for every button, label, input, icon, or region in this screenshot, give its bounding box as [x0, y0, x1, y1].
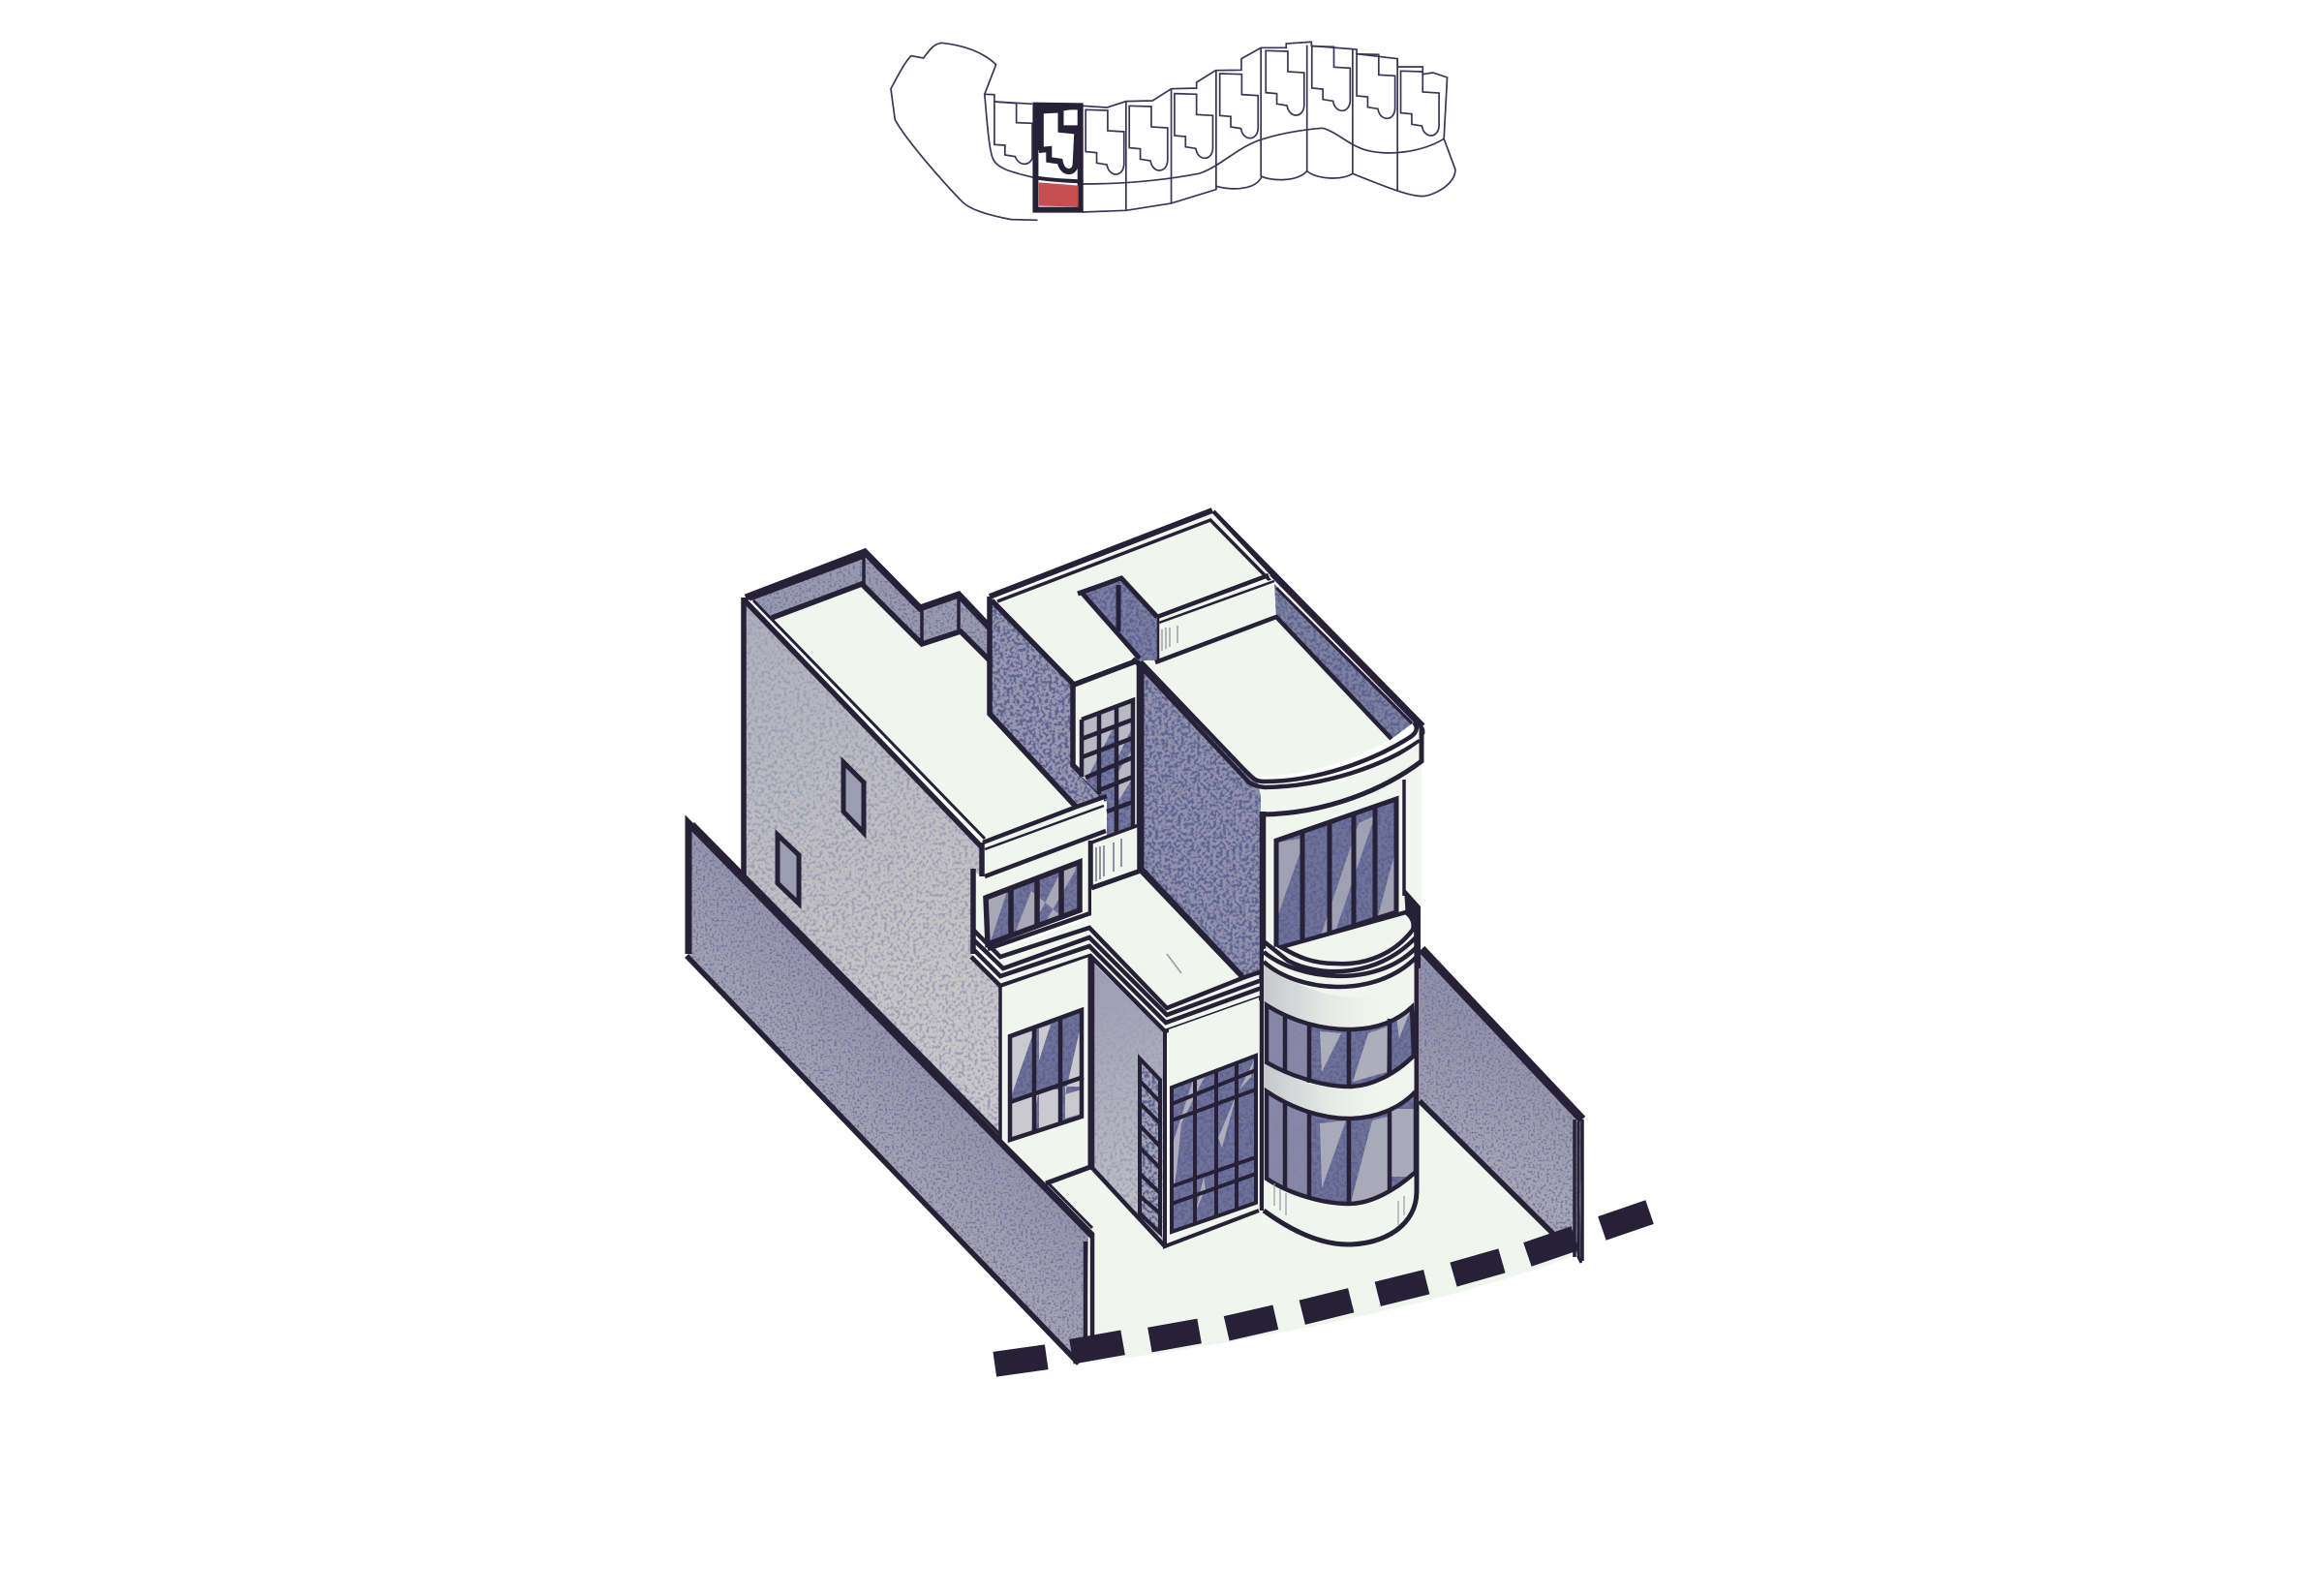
slit window — [1140, 1058, 1160, 1233]
lower curved tower — [1264, 912, 1419, 1244]
small side window upper — [843, 762, 864, 833]
lower ribbon glazing — [1269, 1095, 1414, 1202]
terrace with stepped cornice — [971, 871, 1262, 1031]
void — [1083, 581, 1157, 660]
left block side wall — [744, 598, 1000, 1140]
cap — [1281, 912, 1414, 964]
ribbon window — [988, 866, 1077, 940]
raised volume front face — [1157, 575, 1275, 661]
ground plane — [1046, 1094, 1576, 1363]
right roof parapet — [1212, 512, 1422, 739]
front boundary dashes — [993, 1200, 1654, 1377]
right boundary wall — [1420, 949, 1582, 1263]
left roof parapet — [746, 552, 990, 657]
right roof — [1133, 617, 1422, 787]
upper ribbon glazing — [1269, 1009, 1412, 1085]
left wing front with window — [1000, 956, 1090, 1183]
left boundary wall — [687, 823, 1092, 1364]
plot houses — [994, 46, 1439, 174]
left roof — [744, 584, 1077, 848]
wing window — [1012, 1013, 1080, 1137]
entrance grid window — [1174, 1058, 1254, 1230]
upper roof with void — [990, 510, 1270, 685]
key plan: site map with selected plot — [891, 42, 1455, 220]
small side window lower — [778, 835, 799, 904]
grid window — [1082, 703, 1131, 835]
centre grey wall — [1091, 959, 1165, 1246]
curved tower upper section — [1261, 728, 1422, 1211]
central shadow wall — [1142, 668, 1266, 978]
entrance block with grid window — [1165, 997, 1259, 1246]
site outline — [891, 42, 1455, 220]
selected plot — [1035, 106, 1082, 210]
tall window — [1278, 802, 1394, 945]
central mint column with grid window — [1070, 660, 1141, 841]
axonometric building drawing — [687, 510, 1654, 1377]
hatched recess wall — [1091, 825, 1139, 888]
balcony block with ribbon window — [973, 796, 1139, 954]
cornice arcs — [1264, 937, 1417, 987]
central rear wall in shadow — [990, 597, 1107, 808]
